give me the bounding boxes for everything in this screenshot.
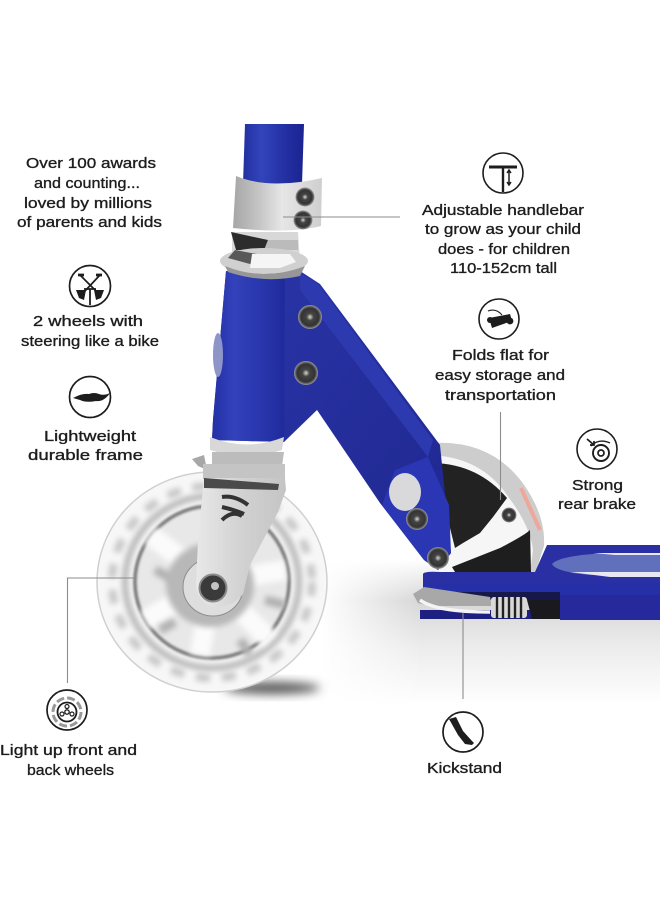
text: kickstand: Kickstand <box>427 760 502 777</box>
text: lightweight: Lightweight <box>44 428 137 445</box>
text: awards: loved by millions <box>24 195 152 212</box>
text: steering: steering like a bike <box>21 333 159 350</box>
icon: rear brake <box>577 429 617 469</box>
text: handlebar <box>422 202 584 277</box>
deck grip tape <box>552 553 660 575</box>
scooter stem <box>243 124 304 184</box>
icon: light up wheel <box>47 690 87 730</box>
leader line: handlebar <box>283 216 400 218</box>
text: brake: rear brake <box>558 496 636 513</box>
text: handlebar: to grow as your child <box>425 221 581 238</box>
lock nuts and washer <box>220 232 308 279</box>
icon: folds flat <box>479 299 519 339</box>
text: handlebar: Adjustable handlebar <box>422 202 584 219</box>
text: folds: Folds flat for <box>452 347 549 364</box>
text: awards: and counting... <box>34 175 140 192</box>
icon: kickstand <box>443 712 483 752</box>
text: awards <box>17 155 162 231</box>
kickstand mechanism <box>413 587 560 619</box>
icon: handlebar <box>483 153 523 193</box>
text: folds <box>435 347 565 404</box>
text: folds: easy storage and <box>435 367 565 384</box>
deck <box>420 545 660 620</box>
rear fender and wheel <box>425 443 544 574</box>
text: light up: Light up front and <box>0 742 137 759</box>
icon: lightweight feather <box>70 376 110 418</box>
main head tube and folding arm <box>212 271 451 570</box>
front wheel <box>97 472 327 692</box>
text: folds: transportation <box>445 387 556 404</box>
text: lightweight: durable frame <box>28 447 143 464</box>
text: handlebar: 110-152cm tall <box>450 260 557 277</box>
text: steering: 2 wheels with <box>33 313 143 330</box>
leader line: fold <box>500 412 502 500</box>
side hinge plate <box>213 333 223 377</box>
text: brake: Strong <box>572 477 623 494</box>
text: brake <box>558 477 636 513</box>
infographic canvas <box>1 124 660 776</box>
text: lightweight <box>28 428 143 464</box>
leader line: wheels <box>68 578 135 683</box>
icon: steering wheels <box>70 266 110 306</box>
text: light up: back wheels <box>27 762 114 779</box>
frame bolts <box>294 305 449 569</box>
text: awards: Over 100 awards <box>26 155 156 172</box>
leader line: kickstand <box>462 613 464 699</box>
text: light up <box>0 742 137 779</box>
floor shadow <box>224 560 660 705</box>
front fork <box>192 437 286 607</box>
scooter illustration <box>97 124 660 692</box>
text: awards: of parents and kids <box>17 214 162 231</box>
text: steering <box>21 313 159 350</box>
text: handlebar: does - for children <box>438 241 570 258</box>
seat clamp <box>233 176 322 231</box>
